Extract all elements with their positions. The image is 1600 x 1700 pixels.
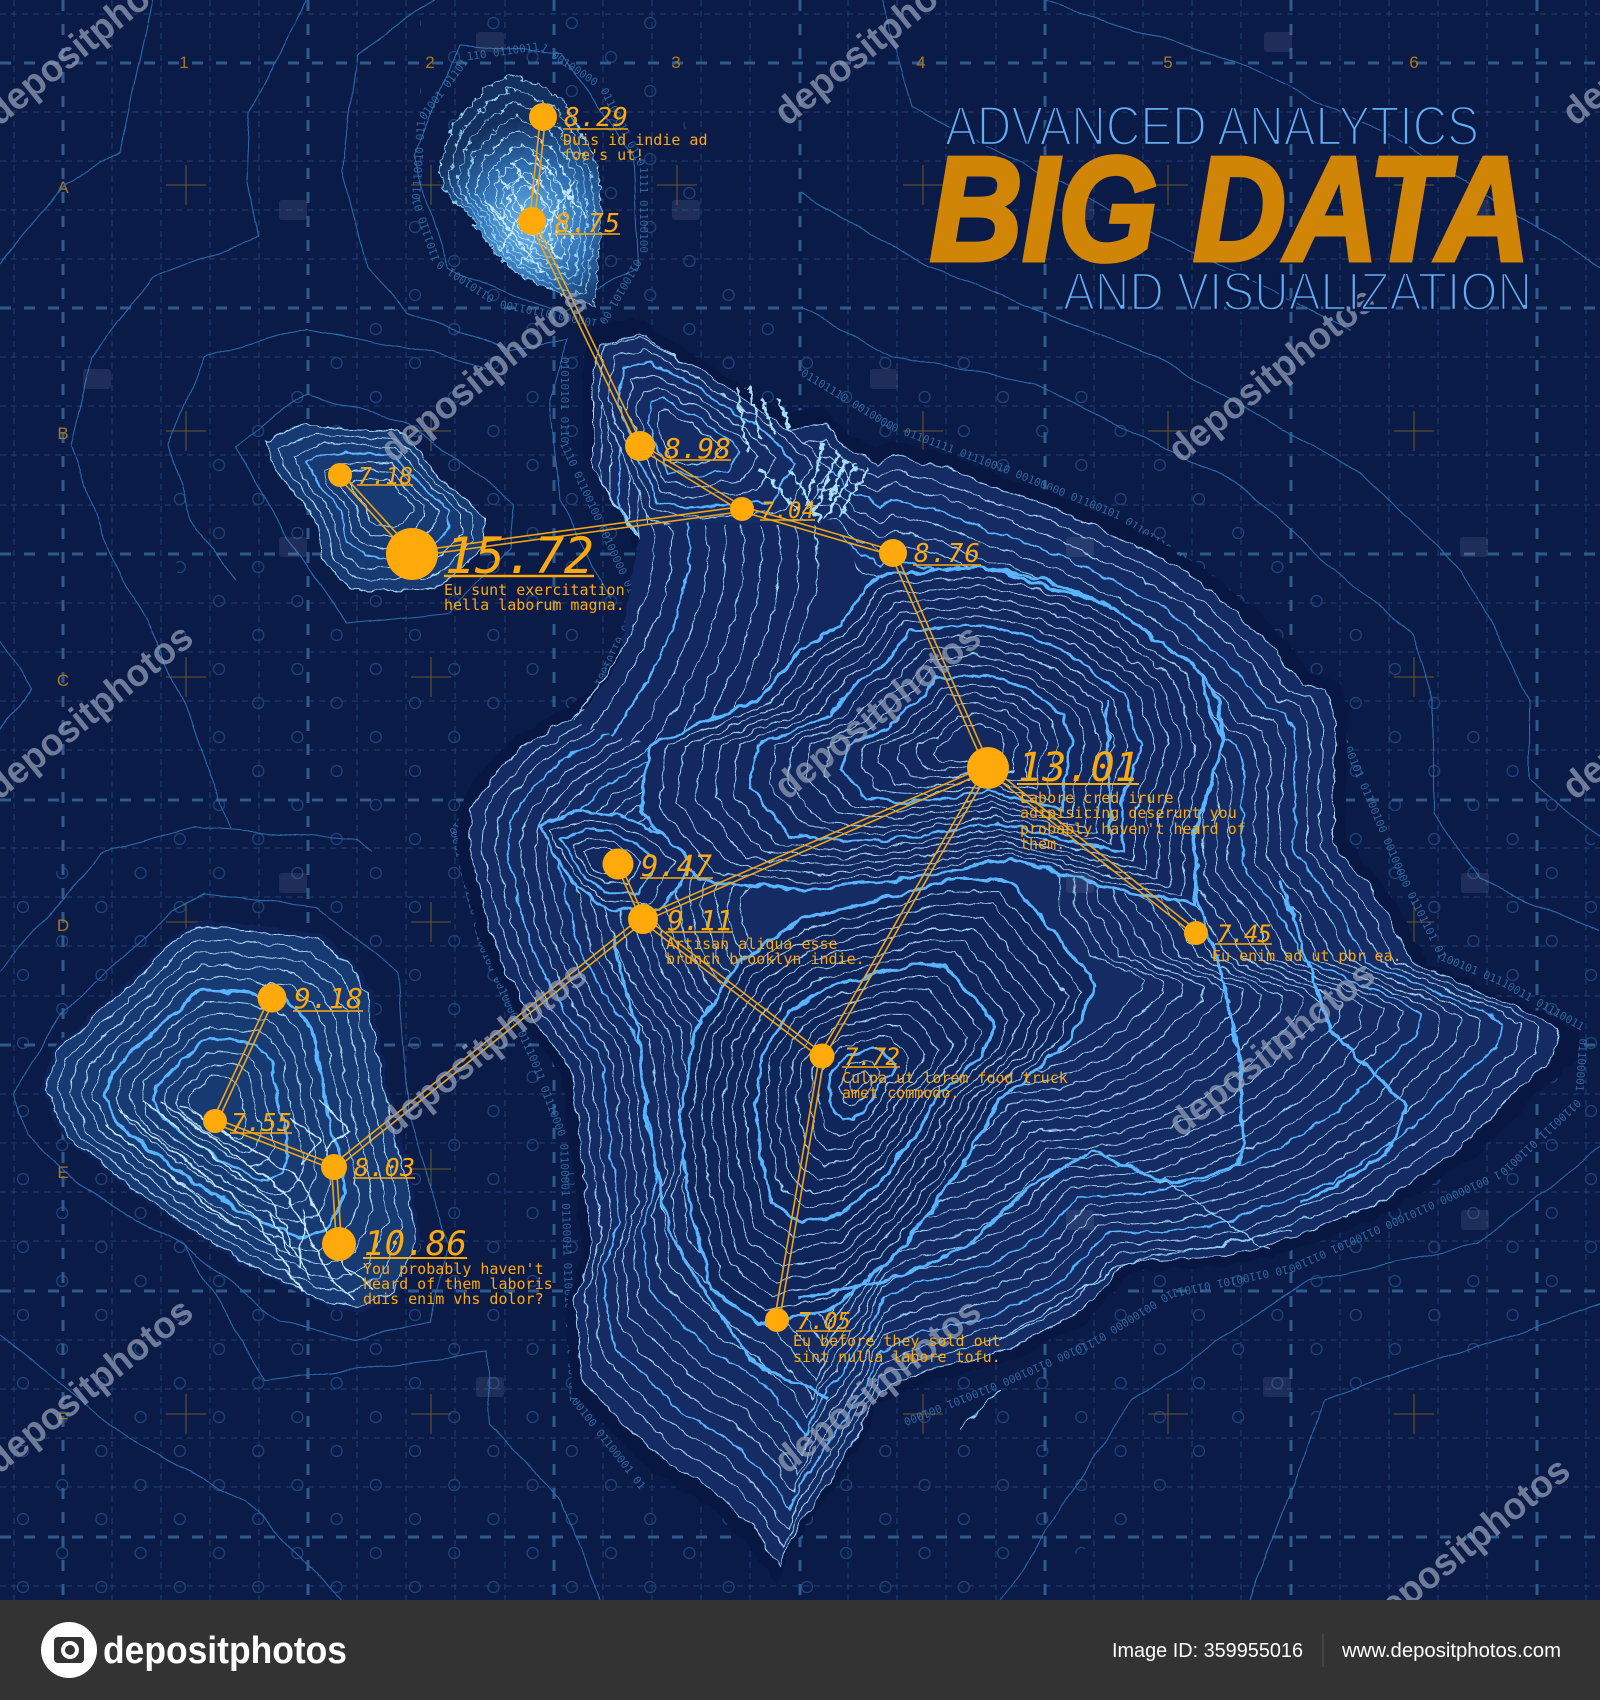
grid column and row labels: D	[57, 916, 69, 935]
node 13.01: probably haven't heard of	[1020, 820, 1246, 838]
node 10.86: heard of them laboris	[363, 1275, 553, 1293]
island: south-west island	[41, 922, 421, 1313]
node 8.75: 8.75	[555, 209, 620, 239]
node 13.01	[967, 745, 1246, 853]
grid column and row labels: C	[57, 671, 69, 690]
grid column and row labels: 3	[671, 53, 681, 72]
grid column and row labels: A	[57, 178, 69, 197]
node 7.18: 7.18	[358, 464, 413, 490]
watermarks: depositphotos	[1160, 279, 1383, 471]
node 9.47: 9.47	[641, 849, 713, 883]
grid column and row labels: B	[57, 424, 69, 443]
island: large main island contour map	[456, 317, 1580, 1584]
node 8.98: 8.98	[664, 432, 731, 465]
node 10.86	[322, 1224, 553, 1308]
node 7.18	[328, 463, 413, 490]
node 13.01: them.	[1020, 835, 1065, 853]
node 9.47	[602, 848, 713, 883]
node 8.03: 8.03	[354, 1153, 415, 1182]
footer website: www.depositphotos.com	[1341, 1640, 1561, 1662]
grid column and row labels: 1	[179, 53, 189, 72]
node 8.29: foe's ut!	[563, 146, 644, 164]
node 9.18: 9.18	[294, 982, 363, 1015]
node 7.55	[203, 1108, 292, 1137]
node 10.86: 10.86	[364, 1224, 467, 1264]
node 15.72	[386, 527, 625, 614]
node 7.05: Eu before they sold out	[793, 1332, 1001, 1350]
node 7.72: Culpa ut lorem food truck	[842, 1069, 1068, 1087]
footer image id: Image ID: 359955016	[1112, 1640, 1303, 1662]
node 10.86: You probably haven't	[363, 1260, 544, 1278]
title: advanced analytics: ADVANCED ANALYTICS	[945, 94, 1479, 157]
node 15.72: hella laborum magna.	[444, 596, 625, 614]
watermarks: depositphotos	[1160, 953, 1383, 1145]
node 7.72: 7.72	[844, 1043, 900, 1071]
node 7.72: amet commodo.	[842, 1084, 959, 1102]
node 15.72: 15.72	[445, 527, 594, 585]
title: and visualization: AND VISUALIZATION	[1063, 262, 1532, 322]
grid column and row labels: 6	[1409, 53, 1419, 72]
watermarks: depositphotos	[372, 279, 595, 471]
node 7.55: 7.55	[231, 1108, 292, 1137]
node 7.04: 7.04	[761, 499, 815, 524]
node 8.29	[529, 103, 708, 164]
node 7.05: 7.05	[797, 1309, 851, 1335]
node 9.18	[258, 982, 363, 1015]
watermark camera icons	[83, 32, 1490, 1397]
node 8.29: Duis id indie ad	[563, 131, 708, 149]
icy ridges on northern peninsula	[737, 388, 868, 520]
grid column and row labels: 2	[425, 53, 435, 72]
node 7.72	[810, 1043, 1068, 1102]
grid column and row labels: E	[57, 1163, 69, 1182]
node 9.11: 9.11	[667, 904, 733, 937]
node 7.45	[1184, 920, 1402, 965]
watermarks: depositphotos	[1355, 1449, 1578, 1641]
grid column and row labels: 5	[1163, 53, 1173, 72]
watermarks: depositphotos	[766, 616, 989, 808]
node 8.29: 8.29	[564, 103, 628, 133]
node 9.11: brunch brooklyn indie.	[666, 950, 865, 968]
footer bar	[0, 1600, 1600, 1700]
node 8.76: 8.76	[914, 539, 980, 569]
node 10.86: duis enim vhs dolor?	[363, 1290, 544, 1308]
node 13.01: Labore cred irure	[1020, 789, 1174, 807]
grid column and row labels	[57, 53, 1419, 1428]
crosshair markers	[166, 165, 1434, 1434]
node 8.98	[625, 431, 731, 465]
node 7.04	[730, 497, 815, 524]
island: north small island	[439, 74, 602, 304]
node 13.01: adipisicing deserunt you	[1020, 804, 1237, 822]
node 7.45: Eu enim ad ut pbr ea.	[1212, 947, 1402, 965]
binary code along coastlines: 01010101 01101110 01100100 00100000 01110100 01101001 01101101 01100101 00100000 01100001 01101110 01100100 00100000 01110011 01110000 01100001 01100011 01100101 00100000 01100100 01100001 01110100 01100001 00100000 01100111 01110010 01101001 01100100	[450, 358, 645, 1490]
node 9.11	[628, 904, 865, 968]
grid column and row labels: F	[58, 1409, 68, 1428]
node 13.01: 13.01	[1018, 745, 1139, 791]
node 7.45: 7.45	[1217, 920, 1272, 948]
node 9.11: Artisan aliqua esse	[666, 935, 838, 953]
node 8.75	[518, 207, 620, 239]
footer logo wordmark: depositphotos	[103, 1630, 347, 1672]
node 7.05: sint nulla labore tofu.	[793, 1348, 1001, 1366]
footer logo icon	[41, 1622, 97, 1678]
watermarks: depositphotos	[766, 1290, 989, 1482]
grid column and row labels: 4	[916, 53, 926, 72]
connection lines	[213, 117, 1198, 1320]
binary code along coastlines: 01101110 00100000 01101111 01110010 00100000 01100101 01101110 01100011 01101111 01100100 00100000 01100101 01100100 00100000 01101101 01100101 01110011 01110011 01100001 01100111 01100101 00100000 01101000 01100101 01110010 01100101 01101110 00100000 01110100 01101000 01100101 00100000 01110010 01100101 01110011 01110100	[802, 369, 1588, 1426]
node 8.76	[879, 539, 981, 569]
node 15.72: Eu sunt exercitation	[444, 581, 625, 599]
node 8.03	[321, 1153, 415, 1182]
watermarks: depositphotos	[372, 953, 595, 1145]
island: middle-left island	[265, 426, 485, 590]
node 7.05	[765, 1308, 1001, 1366]
